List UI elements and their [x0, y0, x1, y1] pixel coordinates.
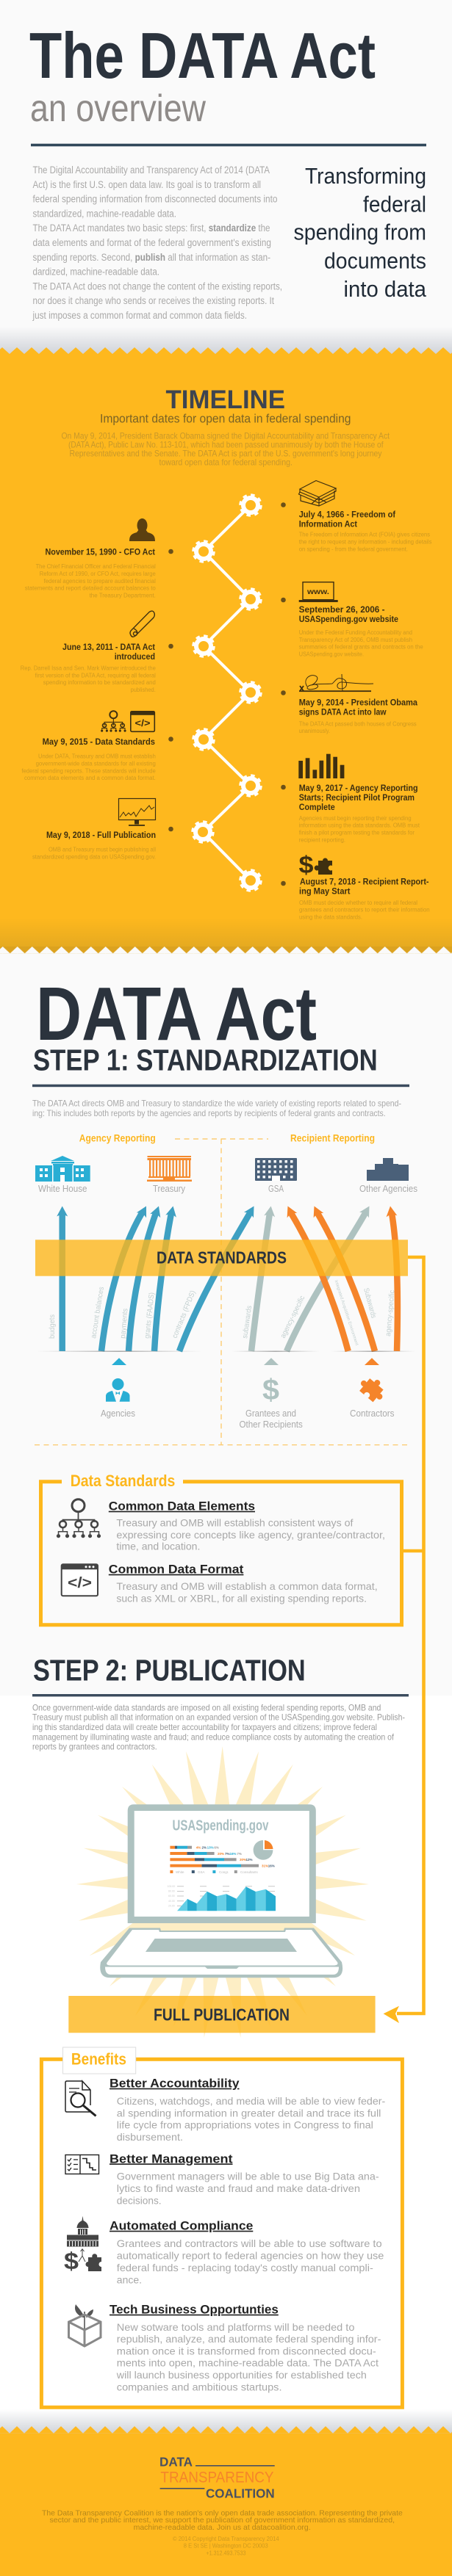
heading: signs DATA Act into law — [299, 709, 387, 717]
intro text block — [32, 164, 282, 321]
heading: May 9, 2017 - Agency Reporting — [299, 784, 418, 793]
tagline: Transforming — [305, 163, 426, 189]
icon: box with sprout — [69, 2304, 101, 2346]
bar value labels: 6% — [214, 1846, 219, 1849]
flow labels: subawards — [241, 1305, 254, 1339]
heading: Complete — [299, 803, 335, 812]
coalition logo: COALITION — [206, 2486, 275, 2500]
coalition logo: DATA — [159, 2454, 193, 2469]
label: agency reporting: Agency Reporting — [79, 1132, 156, 1144]
description: grantees and contractors to report their information — [299, 907, 430, 913]
intro text block: data elements and format of the federal government's existing — [32, 237, 271, 248]
text: common data elements: time, and location. — [116, 1541, 200, 1552]
footer text: The Data Transparency Coalition is the nation's only open data trade association. Representing the private — [42, 2508, 403, 2517]
data standards band: DATA STANDARDS — [157, 1248, 287, 1267]
chart legend: White — [176, 1870, 184, 1874]
event: July 4, 1966 — [298, 480, 432, 552]
intro text block: federal spending information from disconnected documents into — [32, 194, 278, 205]
heading — [299, 606, 398, 624]
description: unanimously. — [299, 728, 330, 734]
description — [299, 532, 432, 552]
bar value labels: 7% — [225, 1852, 230, 1856]
data standards band — [35, 1240, 408, 1276]
connector arrow: standards to full publication — [384, 1257, 423, 2023]
bar value labels: 20% — [218, 1852, 224, 1856]
text: decisions. — [117, 2194, 162, 2206]
tagline: into data — [344, 276, 427, 302]
chart legend — [170, 1870, 259, 1874]
tagline: spending from — [294, 220, 426, 245]
step 1 rule — [32, 1085, 409, 1087]
label: Other Agencies — [359, 1183, 417, 1194]
label: GSA — [268, 1183, 284, 1194]
heading: May 9, 2014 - President Obama — [299, 699, 418, 708]
copyright and contact: 8 E St SE | Washington DC 20003 — [184, 2543, 268, 2550]
panel: step 1 standardization — [32, 972, 417, 1445]
description — [21, 665, 156, 693]
area chart — [168, 1885, 276, 1911]
timeline zigzag line with gears — [193, 495, 261, 891]
event: September 26, 2006 — [299, 582, 423, 657]
header rule — [31, 144, 426, 146]
timeline intro: Representatives and the Senate. The DATA Act is part of the U.S. government's long journey — [69, 448, 382, 458]
bar value labels — [196, 1846, 275, 1868]
text: automatically report to federal agencies on how they use — [117, 2250, 384, 2262]
heading: introduced — [115, 653, 155, 662]
chart legend: Congr. — [219, 1870, 229, 1874]
label: recipient reporting: Recipient Reporting — [290, 1132, 375, 1144]
chart legend: GSA — [198, 1870, 205, 1874]
icon: www laptop — [299, 582, 338, 602]
bar value labels: 7% — [237, 1852, 242, 1856]
section title: DATA Act — [36, 972, 317, 1056]
step 2 text: Treasury must publish all that information on an expanded version of the USASpending.gov website. Publish- — [32, 1712, 405, 1723]
bar value labels: 16% — [268, 1864, 275, 1868]
heading — [62, 643, 155, 662]
text: Government managers will be able to use Big Data ana- — [117, 2171, 379, 2182]
label: Other Recipients — [240, 1419, 303, 1430]
heading: July 4, 1966 - Freedom of — [299, 510, 395, 519]
description: the right to request any information - including details — [299, 539, 432, 546]
heading: Tech Business Opportunties — [110, 2304, 279, 2317]
intro text block: nor does it change who sends or receives the existing reports. It — [32, 295, 274, 306]
icon: bar chart — [298, 754, 344, 778]
flow labels: budgets — [49, 1314, 57, 1339]
heading: June 13, 2011 - DATA Act — [62, 643, 155, 652]
coalition logo: TRANSPARENCY — [160, 2470, 273, 2486]
text — [117, 2171, 379, 2206]
icon: white house — [35, 1156, 90, 1182]
description: finish a pilot program testing the standards for — [299, 829, 415, 836]
description: using the data standards. — [299, 913, 362, 920]
text: ance. — [117, 2273, 142, 2285]
step 1 text: ing: This includes both reports by the agencies and reports by recipients of federal grants and contracts. — [32, 1108, 386, 1118]
icon: GSA building — [255, 1158, 297, 1181]
description — [299, 900, 430, 920]
step 2 heading: STEP 2: PUBLICATION — [33, 1653, 306, 1687]
footer text: sector and the public interest, we support the publication of government information as standardized, — [50, 2516, 395, 2525]
copyright and contact: +1.312.493.7533 — [206, 2550, 246, 2556]
description: Under the Federal Funding Accountability and — [299, 629, 412, 636]
panel: timeline section — [0, 327, 452, 953]
heading — [299, 510, 395, 529]
flow baselines — [37, 1351, 415, 1352]
heading — [299, 784, 418, 812]
text: common data format: such as XML or XBRL, for all existing spending reports. — [116, 1592, 367, 1604]
description: Agencies must begin reporting their spending — [299, 815, 412, 822]
event: November 15, 1990 — [25, 518, 156, 598]
tagline: federal — [363, 191, 426, 217]
event: May 9, 2015 — [21, 711, 156, 781]
box title — [63, 2047, 136, 2074]
heading: Better Accountability — [110, 2077, 240, 2091]
yellow band with zigzag edges — [0, 327, 452, 953]
text: Citizens, watchdogs, and media will be able to view feder- — [117, 2095, 386, 2107]
flow labels: agency-specific — [384, 1290, 396, 1336]
step 2 text — [32, 1702, 405, 1752]
flow labels — [49, 1280, 396, 1346]
description — [299, 629, 423, 657]
intro text block: spending reports. Second, publish all that information as stan- — [32, 252, 270, 263]
heading: common data format: Common Data Format — [109, 1563, 244, 1577]
chart legend: Consultants — [240, 1870, 259, 1874]
heading: common data elements: Common Data Elements — [109, 1500, 255, 1513]
timeline intro: (DATA Act), Public Law No. 113-101, which had been passed unanimously by both the House of — [68, 439, 384, 449]
description: published. — [131, 687, 156, 693]
full publication band: FULL PUBLICATION — [154, 2005, 290, 2025]
label: Contractors — [350, 1408, 395, 1419]
description: the Treasury Department. — [90, 592, 156, 598]
label: Treasury — [153, 1183, 185, 1194]
panel: header — [29, 19, 427, 321]
tagline: documents — [324, 248, 426, 274]
text: companies and ambitious startups. — [117, 2381, 282, 2392]
step 2 text: ing this standardized data will create better accountability for taxpayers and citizens; improve federal — [32, 1722, 377, 1732]
description: Reform Act of 1990, or CFO Act, requires large — [40, 571, 156, 577]
icon: other agencies skyline — [367, 1158, 409, 1181]
intro text block: The Digital Accountability and Transparency Act of 2014 (DATA — [32, 164, 270, 176]
heading: September 26, 2006 - — [299, 606, 385, 615]
source triangles — [112, 1358, 379, 1365]
timeline subheading: Important dates for open data in federal spending — [100, 411, 351, 425]
heading: Automated Compliance — [110, 2220, 253, 2233]
bar value labels: 16% — [229, 1852, 237, 1856]
icon: www laptop: www. — [306, 588, 329, 596]
area chart: 20.00 — [168, 1905, 175, 1908]
event: August 7, 2018 — [298, 851, 430, 920]
icon: rolled document and pen — [130, 611, 154, 637]
bar value labels: 13% — [207, 1846, 214, 1849]
text: disbursement. — [117, 2131, 183, 2143]
description: common data elements and a common data format. — [24, 775, 156, 781]
heading: May 9, 2015 - Data Standards — [43, 738, 155, 747]
copyright and contact — [173, 2536, 279, 2556]
footer text — [42, 2508, 403, 2532]
intro text block: The DATA Act mandates two basic steps: first, standardize the — [32, 222, 270, 234]
description: federal spending reports. These standards will include — [21, 767, 156, 774]
flow labels: Subawards — [362, 1287, 378, 1319]
text: will launch business opportunities for established tech — [116, 2369, 367, 2381]
intro text block: standardized, machine-readable data. — [32, 208, 176, 219]
step 2 text: management by illuminating waste and fraud; and reduce compliance costs by automating the creation of — [32, 1732, 395, 1742]
stacked bar chart — [170, 1846, 275, 1874]
heading: Better Management — [110, 2152, 233, 2166]
flow labels: contracts (FPDS) — [171, 1289, 198, 1339]
area chart: 80.00 — [168, 1890, 175, 1893]
flow labels: grants (FAADS) — [143, 1292, 157, 1339]
text: New sotware tools and platforms will be needed to — [117, 2321, 355, 2333]
box title: Data Standards — [71, 1472, 175, 1490]
heading: August 7, 2018 - Recipient Report- — [300, 878, 429, 887]
step 2 text: reports by grantees and contractors. — [32, 1742, 157, 1752]
timeline dots — [168, 502, 286, 886]
step 1 heading: STEP 1: STANDARDIZATION — [33, 1043, 378, 1077]
description: Transparency Act of 2006, OMB must publish — [299, 637, 412, 643]
intro text block: The DATA Act does not change the content of the existing reports, — [32, 281, 282, 292]
event: June 13, 2011 — [21, 611, 156, 693]
event: May 9, 2014 — [299, 674, 418, 734]
description: government-wide data standards for all existing — [36, 761, 156, 767]
bar value labels: 31% — [262, 1864, 268, 1868]
description: standardized spending data on USASpending.gov. — [32, 853, 156, 860]
text — [116, 2321, 381, 2392]
description: spending information to be standardized and — [43, 679, 156, 686]
icon: code window: </> — [68, 1575, 92, 1591]
timeline intro: toward open data for federal spending. — [159, 457, 293, 467]
timeline intro: On May 9, 2014, President Barack Obama signed the Digital Accountability and Transparency Act — [62, 430, 390, 441]
text: common data format — [116, 1580, 378, 1604]
label: Agencies — [101, 1408, 135, 1419]
area chart: 40.00 — [168, 1900, 175, 1903]
heading: USASpending.gov website — [299, 615, 398, 624]
icon: dollar and puzzle piece: $ — [298, 851, 313, 878]
site name: USASpending.gov — [172, 1818, 269, 1834]
text: al spending information in greater detail and trace its full — [117, 2107, 381, 2119]
description — [21, 753, 156, 781]
description — [299, 815, 420, 843]
text: federal funds - replacing today's costly manual compli- — [117, 2262, 373, 2273]
flow labels: agency-specific — [279, 1295, 306, 1339]
text — [117, 2237, 384, 2285]
full publication band — [68, 1996, 376, 2033]
label: Grantees and — [245, 1408, 296, 1419]
icon: treasury — [147, 1156, 192, 1182]
text — [117, 2095, 386, 2143]
description: first version of the DATA Act, requiring all federal — [35, 672, 156, 679]
area chart: 60.00 — [168, 1895, 175, 1897]
title: The DATA Act — [29, 19, 376, 92]
step 1 text — [32, 1099, 401, 1118]
copyright and contact: © 2014 Copyright Data Transparency 2014 — [173, 2536, 279, 2542]
description: OMB must decide whether to require all federal — [299, 900, 417, 906]
heading: ing May Start — [299, 888, 351, 897]
icon: code window: </> — [135, 717, 151, 728]
event: May 9, 2018 — [32, 799, 156, 860]
icon: dollar sign: $ — [262, 1374, 279, 1406]
box title: Benefits — [71, 2050, 126, 2069]
text: Grantees and contractors will be able to use software to — [117, 2237, 382, 2249]
icon: dollar, arrows and puzzle — [64, 2248, 101, 2274]
icon: org chart — [57, 1499, 101, 1538]
description: information using the data standards. OMB must — [299, 822, 420, 829]
bar value labels: 30% — [240, 1858, 246, 1862]
heading: November 15, 1990 - CFO Act — [46, 548, 155, 557]
description: on spending - from the federal government. — [299, 546, 408, 552]
flow labels: Integrated Acquisition Environment — [334, 1280, 359, 1346]
description: OMB and Treasury must begin publishing all — [49, 847, 156, 853]
description — [299, 720, 417, 734]
pie chart — [254, 1840, 273, 1860]
footer text: machine-readable data. Join us at datacoalition.org. — [134, 2523, 311, 2532]
description: USASpending.gov website. — [299, 651, 364, 657]
subtitle: an overview — [30, 87, 206, 130]
timeline intro — [62, 430, 390, 467]
heading: Starts; Recipient Pilot Program — [299, 794, 415, 803]
laptop screen — [128, 1804, 316, 1923]
icon: agencies person — [106, 1378, 129, 1402]
sunburst rays — [76, 1746, 369, 2038]
icon: code window — [62, 1564, 98, 1596]
intro text block: dardized, machine-readable data. — [32, 267, 159, 278]
heading — [299, 699, 418, 717]
heading — [299, 878, 429, 897]
icon: person silhouette — [129, 518, 155, 541]
laptop — [100, 1804, 342, 1978]
text: ments into open, machine-readable data. The DATA Act — [117, 2357, 379, 2369]
bar value labels: 2% — [201, 1846, 207, 1849]
text: common data elements — [116, 1516, 385, 1552]
text: common data elements: expressing core concepts like agency, grantee/contractor, — [116, 1529, 385, 1541]
icon: code window — [131, 712, 154, 731]
event: May 9, 2017 — [298, 754, 420, 843]
tagline — [294, 163, 427, 302]
dashed dividers — [35, 1139, 409, 1445]
heading: May 9, 2018 - Full Publication — [46, 831, 156, 840]
intro text block: Act) is the first U.S. open data law. Its goal is to transform all — [32, 179, 261, 190]
step 2 text: Once government-wide data standards are imposed on all existing federal spending reports, OMB and — [32, 1702, 381, 1712]
yellow footer band — [0, 2409, 452, 2576]
description: federal agencies to prepare audited financial — [44, 578, 156, 585]
panel: benefits box — [41, 2047, 402, 2407]
description: recipient reporting. — [299, 836, 345, 843]
laptop base — [100, 1928, 342, 1978]
area chart: 100.00 — [168, 1885, 175, 1888]
text: life cycle from appropriations votes in Congress to final — [117, 2119, 373, 2131]
icon: puzzle piece — [356, 1372, 390, 1405]
flow labels: payments — [119, 1308, 130, 1339]
bar value labels: 4% — [196, 1846, 201, 1849]
text: republish, analyze, and automate federal spending infor- — [117, 2333, 381, 2345]
panel: footer — [0, 2409, 452, 2576]
intro text block: just imposes a common format and common data fields. — [32, 310, 247, 321]
flow arrows — [57, 1204, 398, 1351]
icon: dollar and puzzle piece — [298, 851, 332, 878]
description: The Chief Financial Officer and Federal Financial — [36, 563, 156, 570]
text: mation once it is transformed from disconnected docu- — [117, 2345, 376, 2356]
flow labels: account balances — [90, 1287, 106, 1339]
description — [32, 847, 156, 860]
description — [25, 563, 156, 598]
icon: org chart — [101, 711, 126, 732]
label: White House — [38, 1183, 87, 1194]
description: Rep. Darrell Issa and Sen. Mark Warner introduced the — [21, 665, 156, 671]
text: common data format: Treasury and OMB will establish a common data format, — [116, 1580, 378, 1592]
text: common data elements: Treasury and OMB will establish consistent ways of — [116, 1516, 354, 1528]
description: statements and report detailed account balances to — [25, 585, 156, 592]
description: summaries of federal grants and contracts on the — [299, 644, 423, 651]
description: The Freedom of Information Act (FOIA) gives citizens — [299, 532, 430, 538]
step 1 text: The DATA Act directs OMB and Treasury to standardize the wide variety of existing reports related to spend- — [32, 1099, 401, 1109]
icon: signature — [299, 674, 373, 692]
step 2 rule — [32, 1694, 409, 1696]
coalition logo — [159, 2454, 275, 2500]
description: The DATA Act passed both houses of Congress — [299, 720, 417, 727]
heading: Information Act — [299, 520, 357, 529]
bar value labels: 12% — [245, 1858, 253, 1862]
text: lytics to find waste and fraud and make data-driven — [117, 2182, 360, 2194]
panel: data standards box — [41, 1472, 401, 1625]
icon: capitol building — [67, 2216, 98, 2247]
icon: dollar, arrows and puzzle: $ — [64, 2248, 79, 2274]
icon: monitor with line chart — [119, 799, 156, 826]
timeline heading: TIMELINE — [166, 385, 285, 414]
icon: document magnifier — [65, 2081, 96, 2116]
icon: stacked papers box — [298, 480, 336, 506]
description: Under DATA, Treasury and OMB must establish — [38, 753, 156, 760]
panel: step 2 publication — [32, 1653, 409, 2038]
label — [240, 1408, 303, 1430]
icon: checklist — [65, 2154, 98, 2174]
